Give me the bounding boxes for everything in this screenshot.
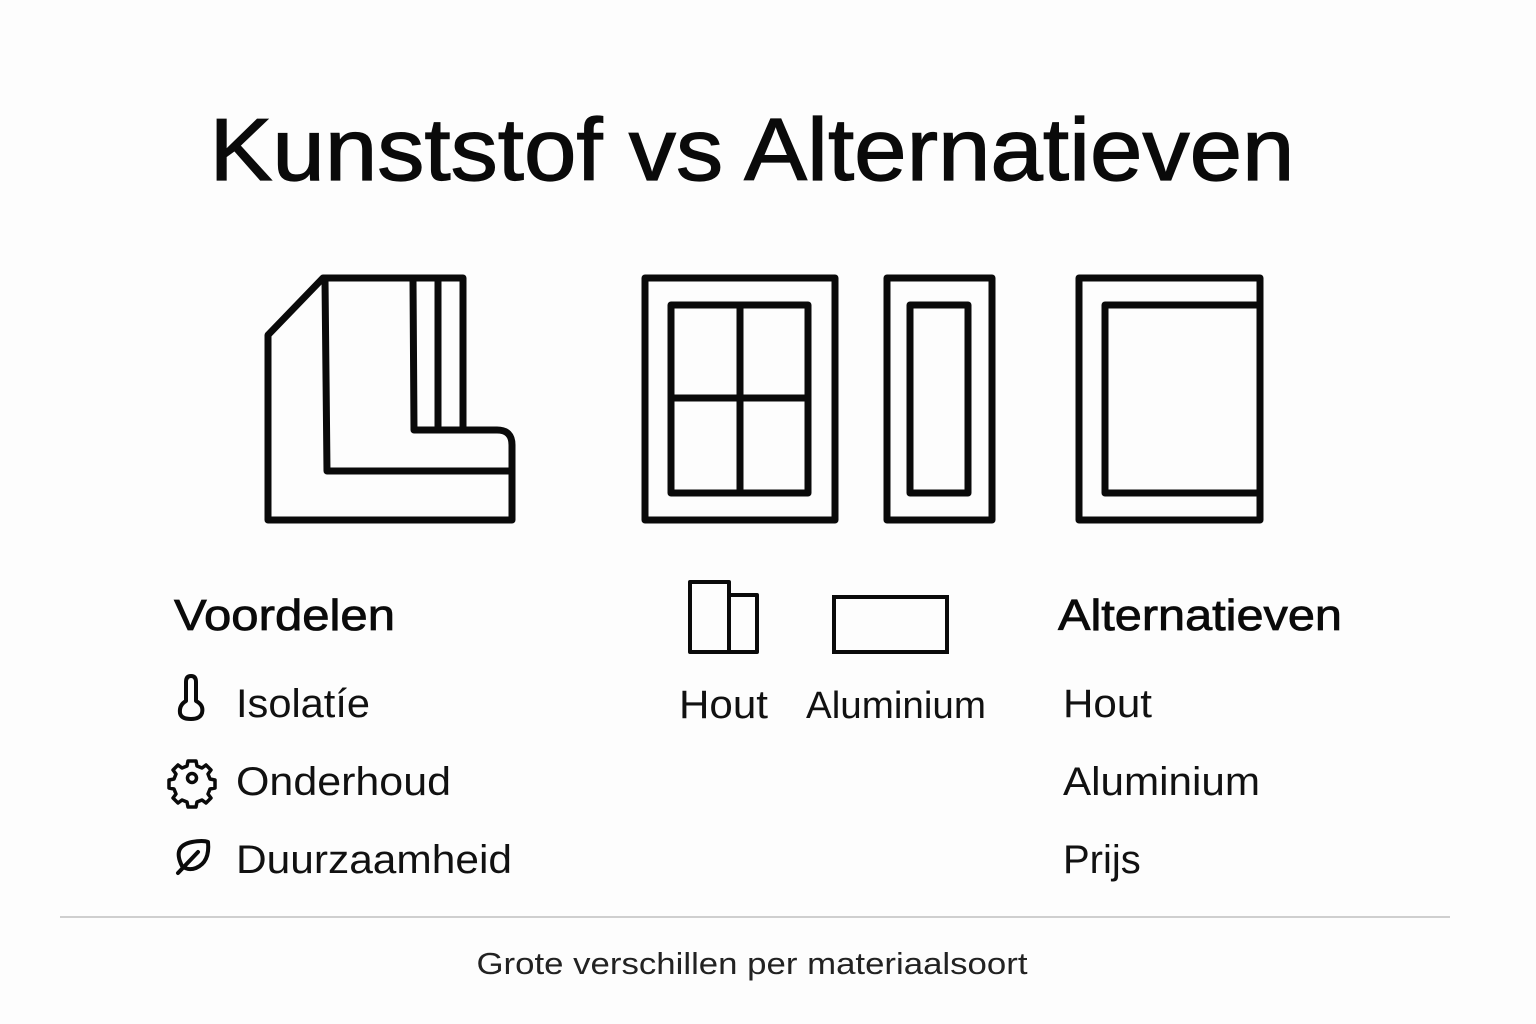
list: voordelen: Isolatíe: [236, 682, 370, 726]
icon: leaf: [178, 841, 208, 873]
icon: narrow window: [887, 278, 992, 520]
icon: kunststof frame profile: [268, 278, 512, 520]
icon: small aluminium profile: [834, 597, 947, 652]
icon: small wood profile: [690, 582, 757, 652]
title: Kunststof vs Alternatieven: [210, 100, 1294, 199]
list: voordelen: Onderhoud: [236, 760, 451, 804]
list: alternatieven: Aluminium: [1063, 760, 1260, 804]
list: alternatieven: Hout: [1063, 682, 1152, 726]
list: alternatieven: Prijs: [1063, 838, 1141, 882]
icon: gear: [169, 761, 215, 807]
label: Hout: Hout: [679, 683, 768, 727]
heading: Alternatieven: Alternatieven: [1058, 591, 1342, 640]
list: voordelen: Duurzaamheid: [236, 838, 512, 882]
label: Aluminium: Aluminium: [806, 685, 986, 727]
heading: Voordelen: Voordelen: [174, 591, 395, 640]
icon: window with cross: [645, 278, 835, 520]
icon: wide window: [1079, 278, 1260, 520]
list: alternatieven: [1063, 682, 1260, 882]
footer caption: Grote verschillen per materiaalsoort: [476, 946, 1028, 981]
list: voordelen: [169, 676, 512, 882]
icon: thermometer: [180, 676, 202, 719]
